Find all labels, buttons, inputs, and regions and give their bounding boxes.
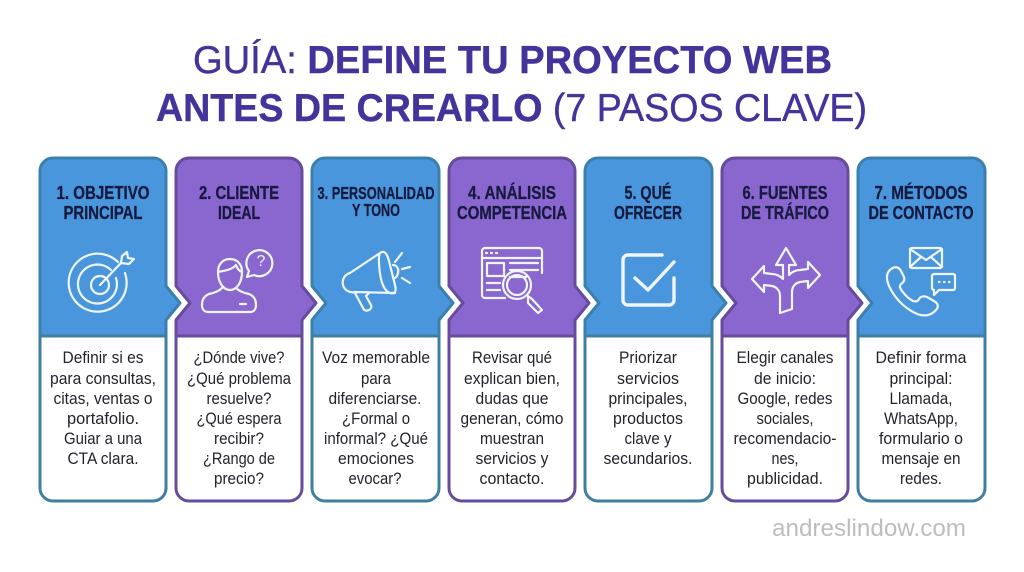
heading: step 2: IDEAL bbox=[218, 202, 260, 223]
text: step 6: sociales, bbox=[756, 410, 814, 428]
heading: step 3 bbox=[318, 183, 434, 220]
text: step 3: diferenciarse. bbox=[328, 390, 422, 408]
icon: phone, envelope and chat bbox=[887, 248, 955, 315]
text: step 3: Voz memorable bbox=[322, 349, 430, 367]
text: step 2: resuelve? bbox=[206, 390, 272, 408]
panel: step 4 análisis competencia bbox=[449, 158, 589, 501]
heading: step 5: OFRECER bbox=[614, 202, 682, 223]
heading: step 2 bbox=[199, 182, 279, 223]
icon: checkbox bbox=[623, 255, 674, 305]
text: step 5: secundarios. bbox=[604, 450, 692, 468]
title bbox=[156, 39, 867, 130]
title: GUÍA: DEFINE TU PROYECTO WEB bbox=[193, 39, 832, 82]
heading: step 4: COMPETENCIA bbox=[457, 202, 567, 223]
heading: step 7: DE CONTACTO bbox=[868, 202, 974, 223]
text: step 1: para consultas, bbox=[50, 370, 156, 388]
text: step 2: ¿Dónde vive? bbox=[194, 349, 284, 367]
heading: step 1: 1. OBJETIVO bbox=[56, 182, 150, 203]
heading: step 6 bbox=[741, 182, 829, 223]
text: step 1 bbox=[50, 349, 156, 468]
icon: megaphone bbox=[343, 252, 410, 311]
text: step 2: ¿Qué espera bbox=[196, 410, 282, 428]
panel: step 5 qué ofrecer bbox=[585, 158, 726, 501]
text: step 3: para bbox=[361, 370, 392, 388]
text: step 7: redes. bbox=[900, 470, 942, 488]
text: step 7: Llamada, bbox=[890, 390, 952, 408]
text: step 7: mensaje en bbox=[882, 450, 960, 468]
icon: three-way arrows bbox=[752, 248, 820, 313]
text: step 2: ¿Qué problema bbox=[187, 370, 292, 388]
text: step 4: servicios y bbox=[476, 450, 549, 468]
text: step 6: recomendacio- bbox=[734, 430, 836, 448]
text: step 4: generan, cómo bbox=[460, 410, 564, 428]
heading: step 6: DE TRÁFICO bbox=[741, 202, 829, 223]
text: step 3: ¿Formal o bbox=[342, 410, 410, 428]
text: step 3 bbox=[322, 349, 430, 488]
text: step 6 bbox=[734, 349, 836, 488]
panel: step 2 cliente ideal bbox=[176, 158, 316, 501]
heading: step 5: 5. QUÉ bbox=[624, 182, 672, 203]
icon: browser and magnifier bbox=[482, 248, 542, 313]
text: step 7: formulario o bbox=[879, 430, 963, 448]
panel: step 1 objetivo principal bbox=[40, 158, 180, 501]
text: step 7: principal: bbox=[890, 370, 952, 388]
heading: step 3: 3. PERSONALIDAD bbox=[318, 183, 434, 203]
text: step 7: WhatsApp, bbox=[884, 410, 958, 428]
heading: step 4 bbox=[457, 182, 567, 223]
heading: step 7 bbox=[868, 182, 974, 223]
text: step 4: muestran bbox=[480, 430, 544, 448]
text: step 1: CTA clara. bbox=[68, 450, 138, 468]
text: step 4: dudas que bbox=[476, 390, 548, 408]
panel: step 6 fuentes de tráfico bbox=[722, 158, 862, 501]
text: step 2: ¿Rango de bbox=[203, 450, 275, 468]
heading: step 1 bbox=[56, 182, 150, 223]
panel: step 3 personalidad y tono bbox=[312, 158, 453, 501]
text: step 1: Guiar a una bbox=[64, 430, 143, 448]
text: step 3: emociones bbox=[338, 450, 414, 468]
text: step 1: portafolio. bbox=[67, 410, 139, 428]
title: ANTES DE CREARLO (7 PASOS CLAVE) bbox=[156, 87, 867, 130]
text: step 2: recibir? bbox=[214, 430, 264, 448]
text: step 6: de inicio: bbox=[754, 370, 816, 388]
text: step 5: clave y bbox=[624, 430, 672, 448]
text: step 4: contacto. bbox=[480, 470, 544, 488]
icon: person with question bubble bbox=[202, 250, 272, 312]
heading: step 7: 7. MÉTODOS bbox=[874, 182, 968, 203]
heading: step 6: 6. FUENTES bbox=[742, 182, 828, 203]
icon: target with arrow bbox=[69, 252, 134, 312]
heading: step 3: Y TONO bbox=[352, 200, 400, 220]
text: step 7: Definir forma bbox=[876, 349, 967, 367]
text: step 2 bbox=[187, 349, 292, 488]
text: step 3: informal? ¿Qué bbox=[324, 430, 428, 448]
text: step 2: precio? bbox=[214, 470, 264, 488]
text: step 5: principales, bbox=[608, 390, 688, 408]
text: step 1: Definir si es bbox=[62, 349, 144, 367]
text: step 5 bbox=[604, 349, 692, 468]
text: step 6: Elegir canales bbox=[736, 349, 834, 367]
text: step 1: citas, ventas o bbox=[54, 390, 152, 408]
text: step 4: explican bien, bbox=[464, 370, 560, 388]
text: step 4: Revisar qué bbox=[472, 349, 552, 367]
text: step 4 bbox=[460, 349, 564, 488]
icon: person with question bubble: ? bbox=[257, 253, 266, 270]
text: step 5: Priorizar bbox=[619, 349, 677, 367]
text: step 5: productos bbox=[613, 410, 683, 428]
text: step 3: evocar? bbox=[348, 470, 402, 488]
text: step 7 bbox=[876, 349, 967, 488]
heading: step 1: PRINCIPAL bbox=[64, 202, 142, 223]
heading: step 5 bbox=[614, 182, 682, 223]
panel: step 7 métodos de contacto bbox=[858, 158, 985, 501]
text: step 6: publicidad. bbox=[747, 470, 823, 488]
watermark: andreslindow.com bbox=[772, 515, 966, 542]
text: step 5: servicios bbox=[617, 370, 679, 388]
text: step 6: Google, redes bbox=[738, 390, 832, 408]
text: step 6: nes, bbox=[772, 450, 798, 468]
heading: step 4: 4. ANÁLISIS bbox=[468, 182, 556, 203]
heading: step 2: 2. CLIENTE bbox=[199, 182, 279, 203]
